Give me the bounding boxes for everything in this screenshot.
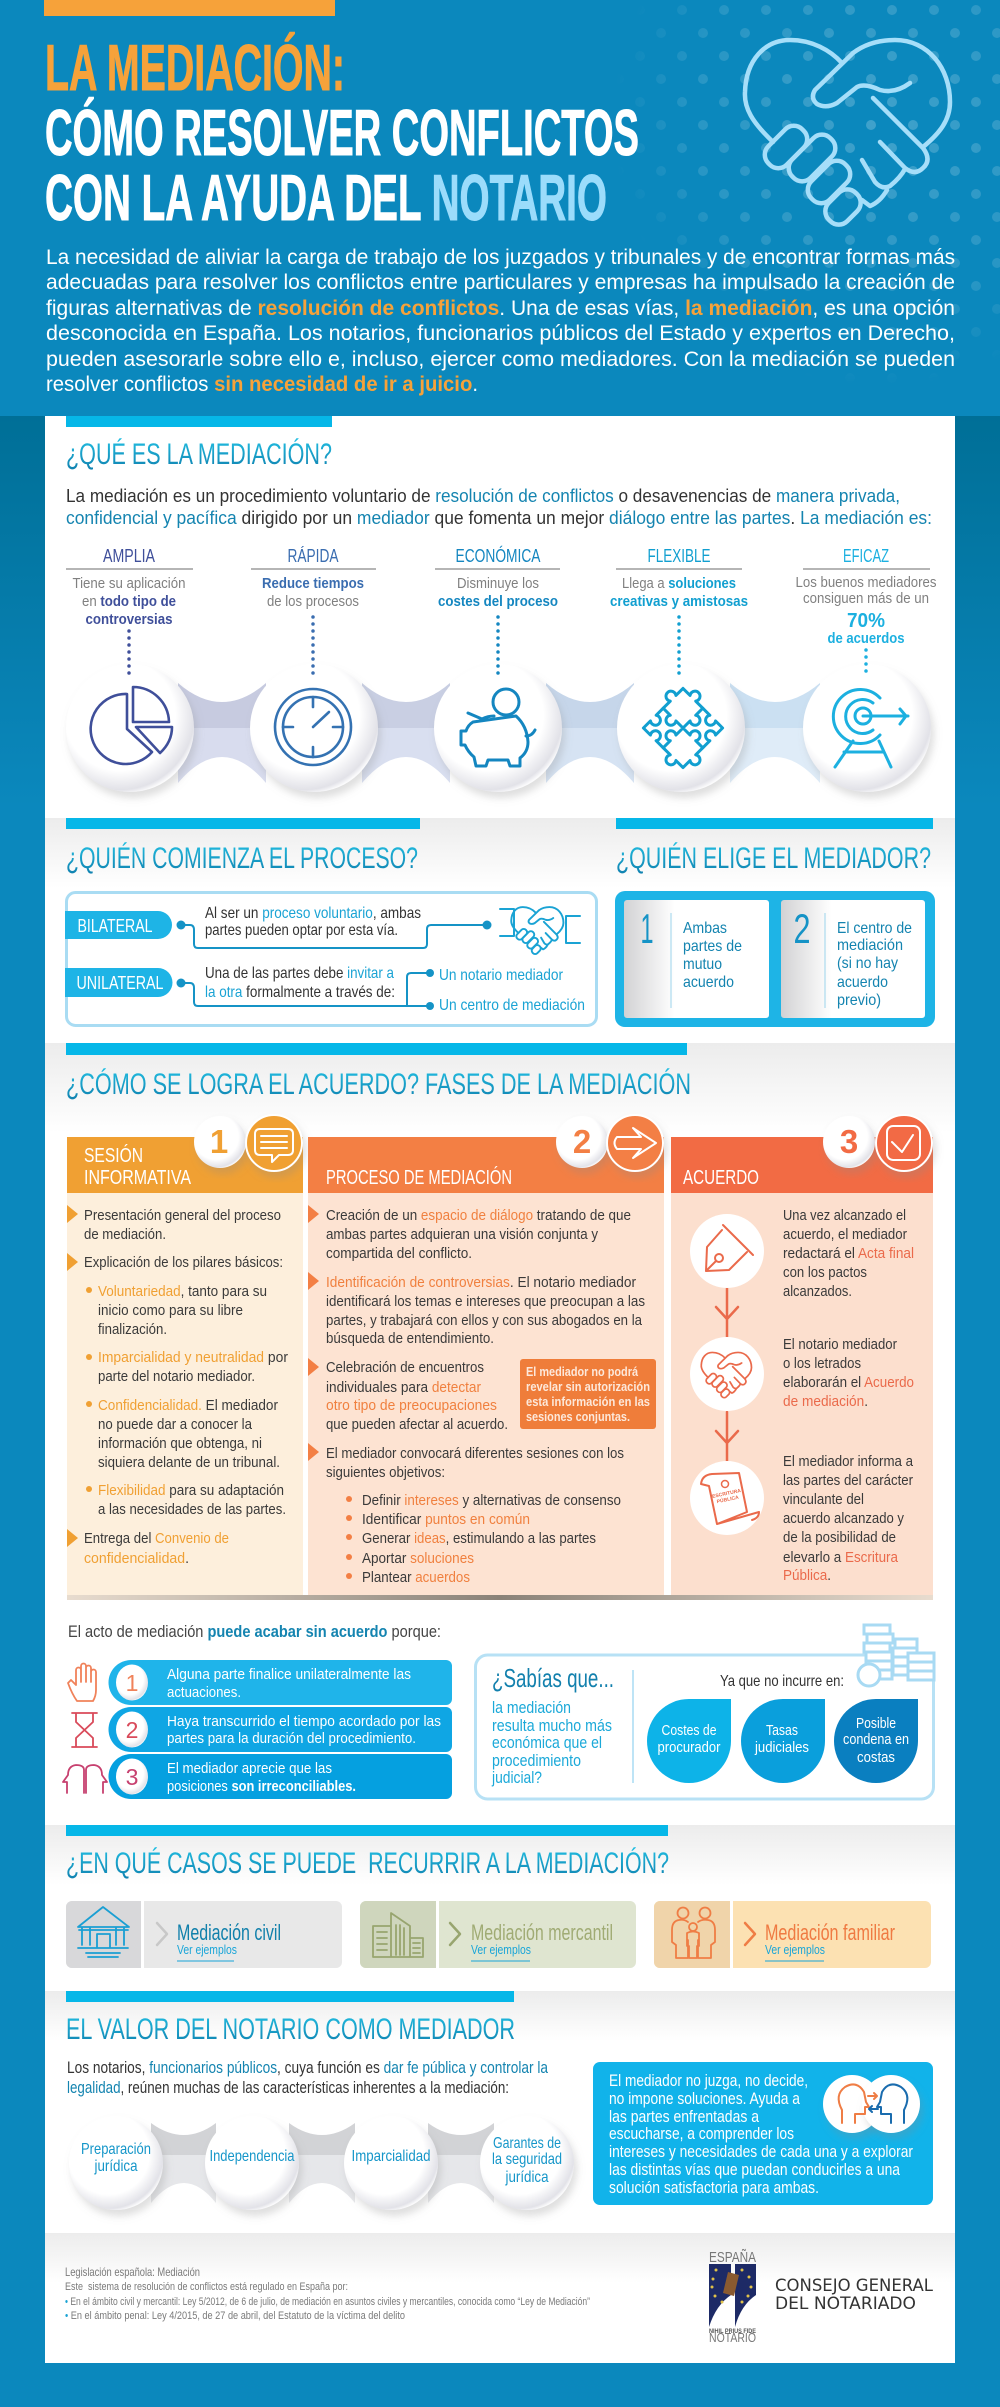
- drop: posible condena en costas: [834, 1699, 918, 1783]
- phase 3 text: o los letrados: [783, 1355, 861, 1372]
- phase 1 text: a las necesidades de las partes.: [98, 1501, 286, 1518]
- option 1: 1: [640, 905, 654, 952]
- options: Un notario mediador: [439, 967, 564, 984]
- phase 3: acuerdo: [671, 1115, 933, 1595]
- panel: en qué casos: [66, 1825, 931, 1968]
- options: Un centro de mediación: [439, 997, 585, 1014]
- text: resulta mucho más: [492, 1716, 612, 1735]
- box: [615, 891, 935, 1027]
- reason 1: actuaciones.: [167, 1684, 241, 1701]
- column: económica: costes del proceso: [438, 593, 558, 610]
- column: eficaz: [796, 546, 936, 676]
- icon: hand: [68, 1664, 96, 1701]
- logo text: [775, 2276, 934, 2314]
- unilateral text: la otra formalmente a través de:: [205, 984, 395, 1001]
- circle labels: jurídica: [94, 2158, 138, 2175]
- reason 2: Haya transcurrido el tiempo acordado por las: [167, 1713, 441, 1730]
- phase 2 text: otro tipo de preocupaciones: [326, 1397, 497, 1414]
- intro text: desconocida en España. Los notarios, funcionarios públicos del Estado y expertos en Derecho,: [46, 322, 955, 345]
- circle labels: [81, 2135, 562, 2186]
- legislation note: Este sistema de resolución de conflictos está regulado en España por:: [65, 2281, 348, 2293]
- drop: tasas judiciales: judiciales: [754, 1739, 809, 1756]
- reason 3: [108, 1754, 452, 1799]
- flow line: [716, 1287, 738, 1461]
- callout: el mediador no juzga: [593, 2062, 933, 2205]
- phase 1: sesión informativa: [67, 1115, 303, 1595]
- circle labels: Preparación: [81, 2141, 151, 2158]
- option 1: [624, 900, 769, 1018]
- connecting bands: [178, 683, 820, 783]
- panel: sabías que: [476, 1625, 934, 1799]
- phase 1 text: confidencialidad.: [84, 1550, 189, 1567]
- phase 2 text: Definir intereses y alternativas de consenso: [362, 1492, 621, 1509]
- legislation note: [65, 2265, 590, 2322]
- card: mediación civil: Ver ejemplos: [177, 1942, 237, 1957]
- option 1: acuerdo: [683, 974, 734, 991]
- icon: target: [833, 689, 908, 767]
- option 2: El centro de: [837, 920, 912, 937]
- number 1: [194, 1116, 246, 1168]
- option 2: previo): [837, 992, 881, 1009]
- phase 1 text: finalización.: [98, 1321, 167, 1338]
- pill: unilateral: [65, 968, 172, 997]
- phase 2 text: Identificación de controversias. El notario mediador: [326, 1274, 636, 1291]
- phase 1 text: Voluntariedad, tanto para su: [98, 1283, 267, 1300]
- card: mediación familiar: [654, 1901, 931, 1968]
- drop: tasas judiciales: [741, 1699, 825, 1783]
- phase 3 text: acuerdo alcanzado y: [783, 1510, 904, 1527]
- phase 3 text: de la posibilidad de: [783, 1529, 896, 1546]
- phase 3 text: elevarlo a Escritura: [783, 1549, 899, 1566]
- icon: puzzle: [632, 677, 734, 779]
- unilateral text: [205, 965, 395, 1001]
- phase 2 text: búsqueda de entendimiento.: [326, 1330, 494, 1347]
- reason 1: 1: [126, 1670, 138, 1696]
- title: [45, 31, 639, 234]
- card: mediación familiar: Ver ejemplos: [765, 1942, 825, 1957]
- text: [67, 2058, 548, 2097]
- column: eficaz: de acuerdos: [828, 630, 904, 647]
- icon circle: handshake: [690, 1337, 764, 1411]
- triangles and bullets: [67, 1205, 92, 1547]
- reason 3: posiciones son irreconciliables.: [167, 1778, 356, 1795]
- column: eficaz: EFICAZ: [843, 546, 889, 566]
- callout: el mediador no juzga: El mediador no juzga, no decide,: [609, 2071, 808, 2090]
- phase 1: sesión informativa: INFORMATIVA: [84, 1167, 192, 1189]
- label: Ya que no incurre en:: [720, 1673, 844, 1690]
- icon: checkbox: [876, 1115, 932, 1171]
- card: mediación civil: Mediación civil: [177, 1920, 281, 1945]
- heading: ¿QUIÉN COMIENZA EL PROCESO?: [66, 842, 418, 875]
- phase 1 text: Flexibilidad para su adaptación: [98, 1482, 284, 1499]
- icon: arrow: [607, 1115, 663, 1171]
- card: mediación mercantil: [360, 1901, 636, 1968]
- icon: piggy bank: [461, 689, 535, 766]
- intro line: El acto de mediación puede acabar sin acuerdo porque:: [68, 1622, 441, 1641]
- icon: hourglass: [72, 1713, 97, 1747]
- number 3: 3: [840, 1123, 858, 1160]
- phase 2 text: Aportar soluciones: [362, 1550, 474, 1567]
- icon: clock: [275, 689, 351, 765]
- legislation note: Legislación española: Mediación: [65, 2265, 200, 2279]
- icon circle: deed: ESCRITURA: [712, 1488, 742, 1500]
- phase 1 text: no puede dar a conocer la: [98, 1416, 253, 1433]
- column: económica: [435, 545, 560, 676]
- reason 1: [108, 1660, 452, 1705]
- icon: family: [672, 1908, 715, 1958]
- icon circle: pen: [690, 1214, 764, 1288]
- circle labels: la seguridad: [492, 2151, 562, 2168]
- option 2: 2: [794, 905, 810, 952]
- white page panel: [45, 416, 955, 2363]
- phase 3 text: Pública.: [783, 1567, 831, 1584]
- text: procedimiento: [492, 1751, 581, 1770]
- column: flexible: [610, 546, 748, 676]
- callout: confidencialidad: [520, 1359, 656, 1429]
- text: económica que el: [492, 1733, 602, 1752]
- intro text: adecuadas para resolver los conflictos entre particulares y empresas ha impulsado la creación de: [46, 271, 955, 294]
- phase 3 text: redactará el Acta final: [783, 1245, 914, 1262]
- column: eficaz: 70%: [847, 610, 885, 632]
- number 2: [556, 1116, 608, 1168]
- box: [66, 892, 596, 1026]
- option 2: mediación: [837, 937, 903, 954]
- phase 2 text: [326, 1207, 645, 1586]
- panel: fases de la mediación: [66, 1043, 933, 1600]
- icon: handshake: [500, 907, 580, 955]
- definition text: [66, 486, 932, 528]
- definition text: La mediación es un procedimiento voluntario de resolución de conflictos o desavenencias de manera privada,: [66, 486, 900, 506]
- drop: costes de procurador: [647, 1699, 731, 1783]
- number 1: 1: [210, 1123, 228, 1160]
- phase 2: proceso de mediación: PROCESO DE MEDIACIÓN: [326, 1166, 512, 1189]
- triangles and bullets: [308, 1205, 352, 1579]
- heading: ¿Sabías que...: [492, 1663, 614, 1693]
- callout: el mediador no juzga: no impone soluciones. Ayuda a: [609, 2089, 800, 2108]
- reason 1: Alguna parte finalice unilateralmente las: [167, 1666, 411, 1683]
- bands: [151, 2123, 494, 2203]
- pill: bilateral: [65, 911, 172, 939]
- box: [476, 1655, 934, 1799]
- callout: confidencialidad: El mediador no podrá: [526, 1364, 639, 1379]
- card: mediación mercantil: Ver ejemplos: [471, 1942, 531, 1957]
- heading: ¿QUÉ ES LA MEDIACIÓN?: [66, 438, 332, 471]
- bilateral text: Al ser un proceso voluntario, ambas: [205, 905, 421, 922]
- phase 1 text: siquiera delante de un tribunal.: [98, 1454, 280, 1471]
- text: legalidad, reúnen muchas de las características inherentes a la mediación:: [67, 2078, 509, 2097]
- callout: confidencialidad: revelar sin autorización: [526, 1379, 650, 1394]
- phase 3 text: El mediador informa a: [783, 1453, 914, 1470]
- option 2: acuerdo: [837, 974, 888, 991]
- icon: coins: [858, 1625, 934, 1686]
- circle labels: Imparcialidad: [352, 2148, 430, 2165]
- number 3: [823, 1116, 875, 1168]
- column: económica: Disminuye los: [457, 575, 539, 592]
- drop: posible condena en costas: Posible: [856, 1715, 896, 1732]
- heading: ¿CÓMO SE LOGRA EL ACUERDO? FASES DE LA MEDIACIÓN: [66, 1068, 691, 1101]
- circle labels: jurídica: [505, 2169, 549, 2186]
- phase 1 text: Imparcialidad y neutralidad por: [98, 1349, 288, 1366]
- phase 2 text: Celebración de encuentros: [326, 1359, 484, 1376]
- icon: heart handshake: [745, 40, 950, 230]
- phase 1 text: Confidencialidad. El mediador: [98, 1397, 278, 1414]
- column: amplia: en todo tipo de: [82, 593, 176, 610]
- column: económica: ECONÓMICA: [456, 545, 540, 566]
- column: rápida: Reduce tiempos: [262, 575, 364, 592]
- phase 2 text: partes, y trabajará con ellos y con sus abogados en la: [326, 1312, 643, 1329]
- column: flexible: creativas y amistosas: [610, 593, 748, 610]
- text: judicial?: [491, 1768, 542, 1787]
- phase 3 text: las partes del carácter: [783, 1472, 913, 1489]
- phase 3 text: El notario mediador: [783, 1336, 897, 1353]
- icon: pie chart: [91, 687, 172, 764]
- title: LA MEDIACIÓN:: [45, 31, 345, 104]
- column: rápida: de los procesos: [267, 593, 359, 610]
- column: rápida: RÁPIDA: [288, 546, 338, 566]
- card: mediación familiar: Mediación familiar: [765, 1920, 895, 1945]
- phase 2 text: Plantear acuerdos: [362, 1569, 470, 1586]
- phase 1 text: [84, 1207, 288, 1567]
- phase 3 text: acuerdo, el mediador: [783, 1226, 907, 1243]
- callout: confidencialidad: esta información en las: [526, 1394, 650, 1409]
- phase 3 text: elaborarán el Acuerdo: [783, 1374, 914, 1391]
- column: amplia: Tiene su aplicación: [72, 575, 186, 592]
- panel: el valor del notario: [66, 1991, 933, 2210]
- header dot pattern: [636, 5, 1000, 360]
- title: CON LA AYUDA DEL NOTARIO: [45, 161, 607, 234]
- phase 1 text: de mediación.: [84, 1226, 166, 1243]
- callout: el mediador no juzga: intereses y necesidades de cada una y a explorar: [609, 2142, 913, 2161]
- callout: el mediador no juzga: las distintas vías que puedan conducirles a una: [609, 2160, 900, 2179]
- phase 2 text: identificará los temas e intereses que preocupan a las: [326, 1293, 645, 1310]
- phase 3 text: con los pactos: [783, 1264, 867, 1281]
- drop: tasas judiciales: Tasas: [766, 1722, 798, 1739]
- phase 1 text: Presentación general del proceso: [84, 1207, 281, 1224]
- definition text: confidencial y pacífica dirigido por un mediador que fomenta un mejor diálogo entre las partes. La mediación es:: [66, 508, 932, 528]
- logo: notariado: NOTARIO: [709, 2330, 756, 2345]
- icon: heads: [63, 1765, 107, 1793]
- phase 3: acuerdo: ACUERDO: [683, 1167, 759, 1189]
- phase 2 text: individuales para detectar: [326, 1379, 481, 1396]
- phase 3 text: alcanzados.: [783, 1283, 852, 1300]
- text: [491, 1698, 612, 1787]
- pill: unilateral: UNILATERAL: [76, 973, 164, 993]
- bilateral text: partes pueden optar por esta vía.: [205, 922, 398, 939]
- intro text: pueden asesorarle sobre ello e, incluso, ejercer como mediadores. Con la mediación se pueden: [46, 348, 955, 371]
- phase 1 text: parte del notario mediador.: [98, 1368, 255, 1385]
- unilateral text: Una de las partes debe invitar a: [205, 965, 394, 982]
- logo text: DEL NOTARIADO: [775, 2294, 916, 2314]
- phase 2 text: compartida del conflicto.: [326, 1245, 472, 1262]
- phase 2 text: Creación de un espacio de diálogo tratando de que: [326, 1207, 631, 1224]
- logo: notariado: [709, 2249, 756, 2345]
- column: amplia: [66, 546, 193, 676]
- callout: el mediador no juzga: solución satisfactoria para ambas.: [609, 2178, 819, 2197]
- heading: ¿EN QUÉ CASOS SE PUEDE RECURRIR A LA MEDIACIÓN?: [66, 1847, 669, 1880]
- phase 3 text: Una vez alcanzado el: [783, 1207, 906, 1224]
- reason 2: partes para la duración del procedimiento.: [167, 1730, 416, 1747]
- legislation note: • En el ámbito civil y mercantil: Ley 5/2012, de 6 de julio, de mediación en asuntos civiles y mercantiles, conocida como “Ley de Mediación”: [65, 2296, 590, 2308]
- panel: quién comienza el proceso: [65, 818, 596, 1026]
- phase 3 text: vinculante del: [783, 1491, 864, 1508]
- text: Los notarios, funcionarios públicos, cuya función es dar fe pública y controlar la: [67, 2058, 548, 2077]
- option 1: mutuo: [683, 956, 722, 973]
- reason 2: [108, 1707, 452, 1752]
- header: [44, 0, 955, 396]
- reason 3: El mediador aprecie que las: [167, 1760, 332, 1777]
- logo: notariado: NIHIL PRIUS FIDE: [709, 2329, 756, 2335]
- panel: acabar sin acuerdo: [63, 1622, 452, 1799]
- icon: two heads: [823, 2075, 920, 2133]
- orange tab: [44, 0, 335, 16]
- drop: posible condena en costas: condena en: [843, 1731, 909, 1748]
- options: [439, 967, 585, 1014]
- intro text: La necesidad de aliviar la carga de trabajo de los juzgados y tribunales y de encontrar formas más: [46, 246, 955, 269]
- circle labels: Independencia: [210, 2148, 295, 2165]
- column: amplia: AMPLIA: [103, 546, 155, 566]
- callout: el mediador no juzga: las partes enfrentadas a: [609, 2107, 759, 2126]
- heading: EL VALOR DEL NOTARIO COMO MEDIADOR: [66, 2013, 515, 2046]
- phase 3 text: de mediación.: [783, 1393, 868, 1410]
- bilateral text: [205, 905, 421, 939]
- option 1: Ambas: [683, 920, 727, 937]
- logo: notariado: ESPAÑA: [709, 2249, 756, 2266]
- phase 2: proceso de mediación: [308, 1115, 664, 1595]
- logo text: CONSEJO GENERAL: [775, 2276, 934, 2296]
- option 2: (si no hay: [837, 955, 898, 972]
- icon: chat: [246, 1115, 302, 1171]
- connector lines: [181, 925, 487, 1006]
- column: eficaz: Los buenos mediadores: [796, 574, 936, 591]
- phase 1 text: inicio como para su libre: [98, 1302, 243, 1319]
- phase 3 text: [783, 1207, 914, 1584]
- circles: [69, 2116, 574, 2210]
- reason 3: 3: [126, 1764, 138, 1790]
- reason 2: 2: [126, 1717, 138, 1743]
- phase 2 text: El mediador convocará diferentes sesiones con los: [326, 1445, 624, 1462]
- phase 2 text: siguientes objetivos:: [326, 1464, 445, 1481]
- intro text: [46, 246, 955, 396]
- icon circle: deed: [690, 1461, 764, 1535]
- column: flexible: FLEXIBLE: [648, 546, 710, 566]
- card: mediación mercantil: Mediación mercantil: [471, 1920, 613, 1945]
- pill: bilateral: BILATERAL: [78, 916, 152, 936]
- legislation note: • En el ámbito penal: Ley 4/2015, de 27 de abril, del Estatuto de la víctima del delito: [65, 2310, 405, 2322]
- phase 2 text: que pueden afectar al acuerdo.: [326, 1416, 508, 1433]
- intro text: figuras alternativas de resolución de conflictos. Una de esas vías, la mediación, es una opción: [46, 297, 955, 320]
- icon circle: deed: PÚBLICA: [716, 1494, 740, 1505]
- drop: costes de procurador: Costes de: [662, 1722, 716, 1739]
- column: flexible: Llega a soluciones: [622, 575, 736, 592]
- panel: quién elige el mediador: [615, 818, 935, 1027]
- footer: [65, 2249, 934, 2345]
- intro text: resolver conflictos sin necesidad de ir a juicio.: [46, 373, 478, 396]
- phase 1 text: información que obtenga, ni: [98, 1435, 262, 1452]
- phase 2 text: Identificar puntos en común: [362, 1511, 530, 1528]
- phase 2 text: ambas partes adquieran una visión conjunta y: [326, 1226, 598, 1243]
- option 2: [781, 900, 925, 1018]
- icon: courthouse: [78, 1907, 129, 1957]
- drop: costes de procurador: procurador: [658, 1739, 720, 1756]
- phase 2 text: Generar ideas, estimulando a las partes: [362, 1530, 596, 1547]
- callout: confidencialidad: sesiones conjuntas.: [526, 1409, 630, 1424]
- option 1: partes de: [683, 938, 742, 955]
- phase 1: sesión informativa: SESIÓN: [84, 1144, 143, 1167]
- card: mediación civil: [66, 1901, 342, 1968]
- phase 1 text: Explicación de los pilares básicos:: [84, 1254, 283, 1271]
- drop: posible condena en costas: costas: [857, 1749, 895, 1766]
- text: la mediación: [492, 1698, 571, 1717]
- number 2: 2: [573, 1123, 591, 1160]
- panel: qué es la mediación: [66, 416, 936, 792]
- column: rápida: [251, 546, 376, 676]
- circle labels: Garantes de: [493, 2135, 561, 2152]
- icon: buildings: [373, 1913, 423, 1957]
- column: eficaz: consiguen más de un: [803, 590, 929, 607]
- side strips: [0, 416, 1000, 806]
- phase 1 text: Entrega del Convenio de: [84, 1530, 229, 1547]
- circles: [66, 664, 931, 792]
- column: amplia: controversias: [86, 611, 172, 628]
- callout: el mediador no juzga: escucharse, a comprender los: [609, 2124, 794, 2143]
